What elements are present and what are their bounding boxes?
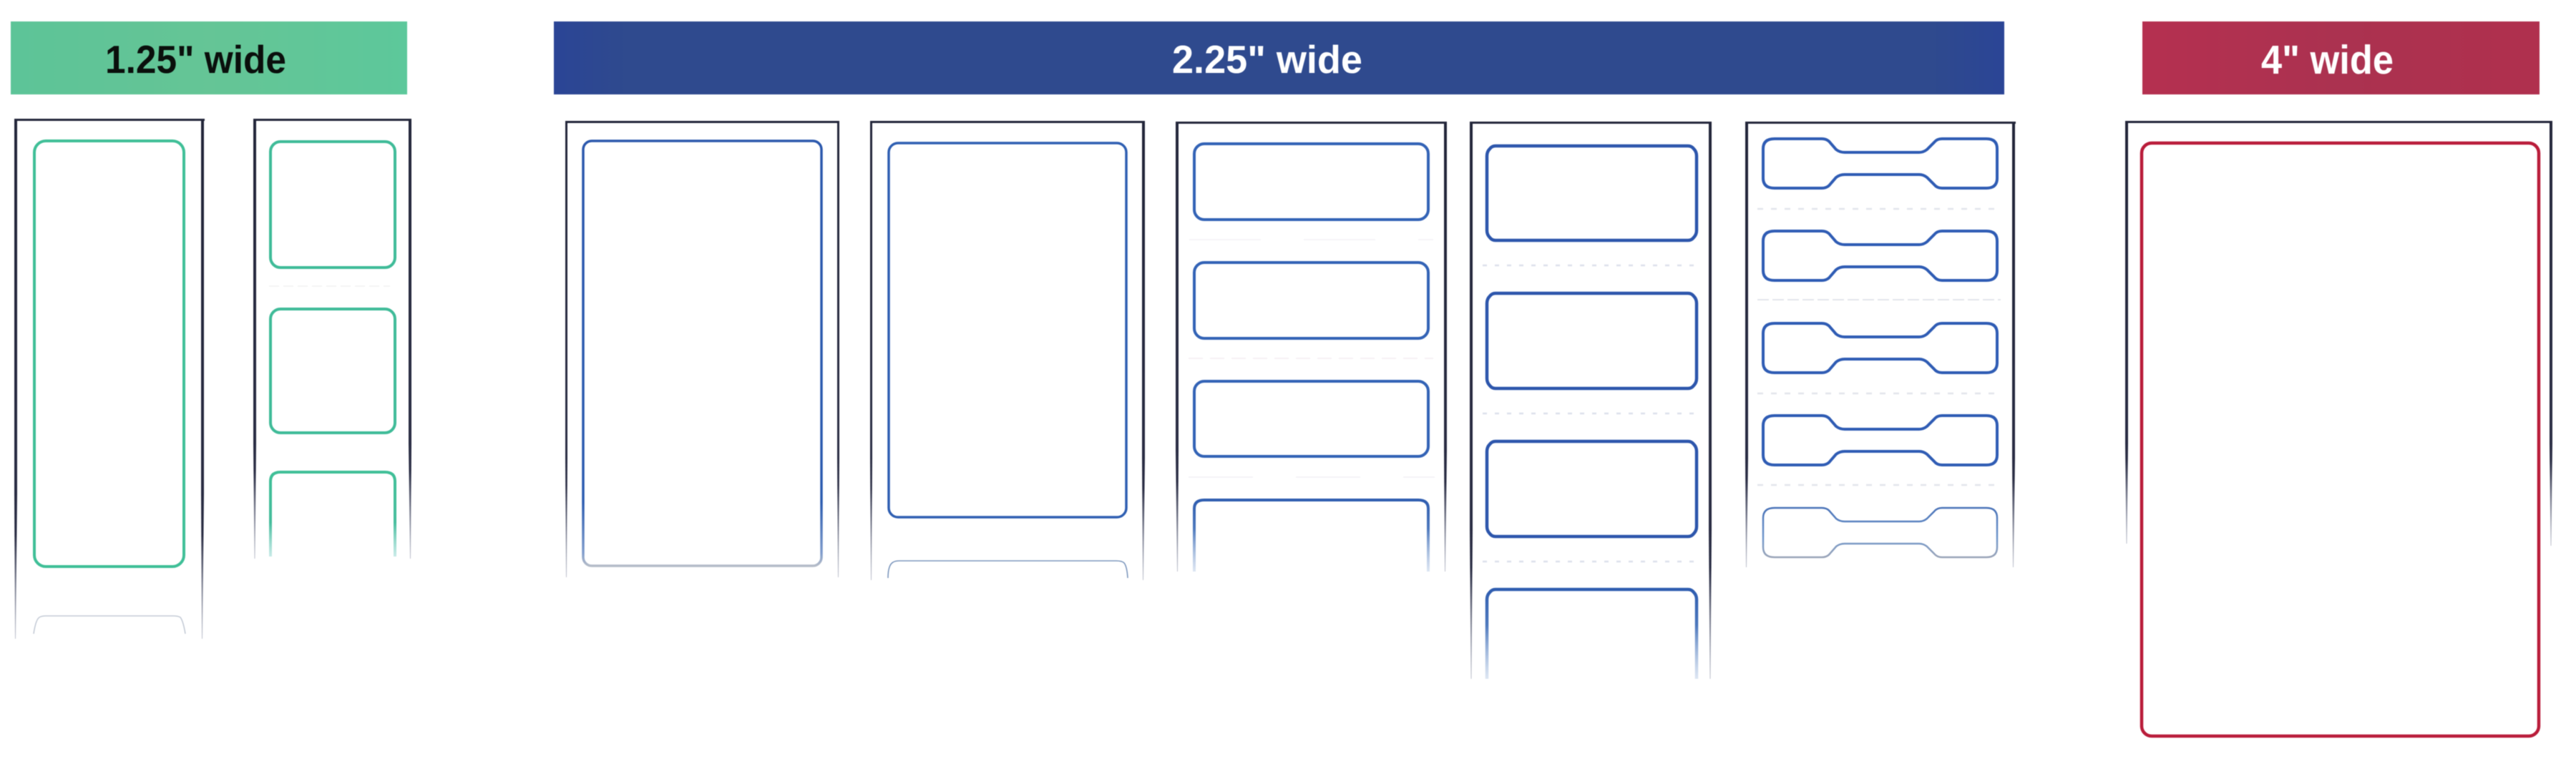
header: 4 inch wide bbox=[2142, 21, 2540, 94]
panel: 1.25 inch square label roll bbox=[253, 119, 411, 559]
label: tall blue rectangle bbox=[889, 143, 1126, 517]
label: large red rectangle bbox=[2142, 143, 2539, 736]
label: chamfered blue one bbox=[1487, 146, 1697, 240]
label: tall green rectangle bbox=[34, 141, 184, 567]
panel: 4 inch label roll bbox=[2125, 121, 2552, 736]
label: chamfered blue three bbox=[1487, 441, 1697, 537]
label: green square three, fading bbox=[270, 472, 395, 557]
header: 2.25 inch wide: 2.25" wide bbox=[1172, 37, 1362, 82]
label: dogbone four bbox=[1763, 416, 1997, 465]
header: 1.25 inch wide bbox=[11, 21, 407, 94]
panel: 2.25 inch rounded rectangle roll bbox=[1176, 122, 1447, 572]
label: tall blue rectangle bbox=[583, 141, 821, 566]
label: blue rectangle four, fading bbox=[1194, 500, 1428, 572]
label: dogbone three bbox=[1763, 323, 1997, 373]
label: chamfered blue four, fading bbox=[1487, 589, 1697, 679]
label: faded next label bbox=[34, 616, 185, 634]
label: chamfered blue two bbox=[1487, 293, 1697, 388]
panel: 1.25 inch single tall label roll bbox=[14, 119, 205, 639]
label: blue rectangle two bbox=[1194, 263, 1428, 338]
label: blue rectangle one bbox=[1194, 144, 1428, 220]
panel: 2.25 inch tall label roll two bbox=[870, 121, 1145, 580]
label: green square two bbox=[270, 309, 395, 433]
header: 4 inch wide: 4" wide bbox=[2261, 37, 2394, 83]
panel: 2.25 inch tall label roll one bbox=[565, 121, 839, 577]
header: 1.25 inch wide: 1.25" wide bbox=[105, 37, 286, 82]
label: blue rectangle three bbox=[1194, 381, 1428, 456]
panel: 2.25 inch dogbone wristband label roll bbox=[1745, 122, 2016, 567]
label: dogbone five, fading bbox=[1763, 508, 1997, 557]
label: dogbone two bbox=[1763, 231, 1997, 280]
label: faded next label bbox=[888, 561, 1128, 578]
header: 2.25 inch wide bbox=[554, 21, 2004, 94]
panel: 2.25 inch chamfered label roll bbox=[1470, 122, 1712, 679]
label: green square one bbox=[270, 142, 395, 268]
label: dogbone one bbox=[1763, 139, 1997, 188]
